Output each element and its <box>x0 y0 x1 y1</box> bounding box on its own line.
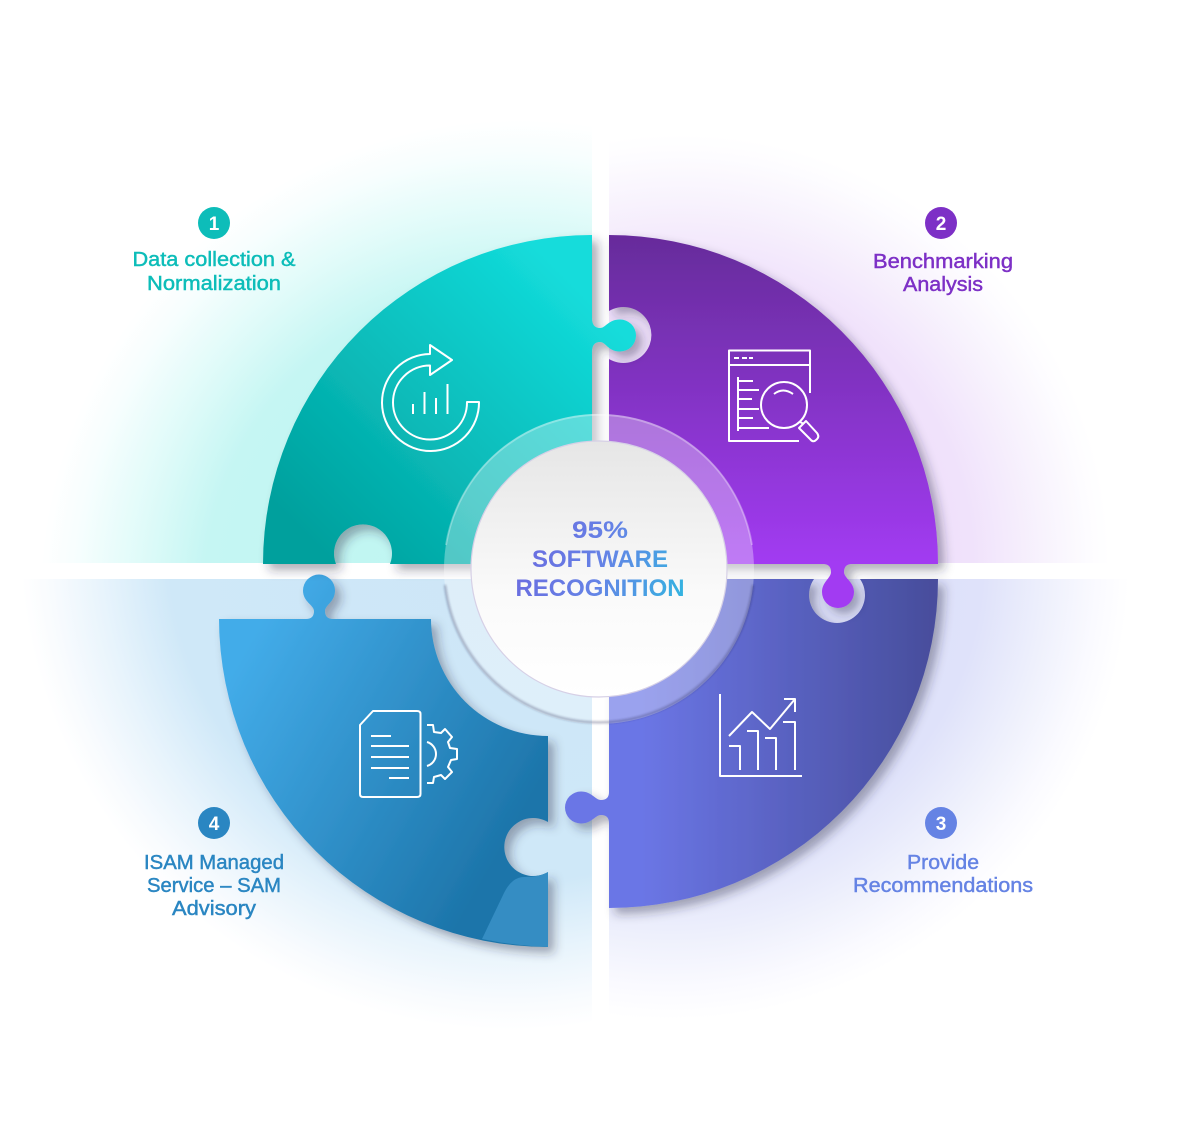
step 3 label <box>853 807 1033 897</box>
text: benchmarking analysis: Analysis <box>903 274 983 296</box>
number badge 3: 3 <box>936 814 946 835</box>
text: benchmarking analysis <box>873 251 1013 296</box>
step 2 label <box>873 207 1013 296</box>
heading: 95% software recognition: RECOGNITION <box>516 575 684 602</box>
text: benchmarking analysis: Benchmarking <box>873 251 1013 273</box>
icon: growth chart <box>720 694 802 776</box>
icon: document with gear <box>360 711 457 797</box>
text: provide recommendations: Provide <box>907 852 979 874</box>
text: isam managed service: Advisory <box>172 898 256 920</box>
heading: 95% software recognition <box>516 517 684 602</box>
icon: refresh arrow with bars <box>382 345 479 451</box>
heading: 95% software recognition: SOFTWARE <box>532 546 668 573</box>
panel: puzzle piece 4 <box>219 574 548 947</box>
text: provide recommendations: Recommendations <box>853 875 1033 897</box>
text: isam managed service: Service – SAM <box>147 875 281 897</box>
panel: puzzle piece 1 <box>263 235 636 564</box>
number badge 4: 4 <box>209 814 220 835</box>
icon: browser window with magnifier <box>729 350 818 441</box>
central ring <box>444 414 754 724</box>
central circle with heading <box>471 441 727 697</box>
text: isam managed service <box>144 852 284 920</box>
text: provide recommendations <box>853 852 1033 897</box>
panel: puzzle piece 3 <box>565 579 938 908</box>
text: isam managed service: ISAM Managed <box>144 852 284 874</box>
step 4 label <box>144 807 284 920</box>
text: data collection and normalization: Data collection & <box>132 249 296 271</box>
number badge 1: 1 <box>209 214 220 235</box>
number badge 3 <box>925 807 957 839</box>
text: data collection and normalization: Normalization <box>147 273 281 295</box>
text: data collection and normalization <box>132 249 296 295</box>
number badge 1 <box>198 207 230 239</box>
step 1 label <box>132 207 296 295</box>
heading: 95% software recognition: 95% <box>572 517 628 544</box>
panel: puzzle piece 2 <box>609 235 938 608</box>
number badge 2: 2 <box>936 214 946 235</box>
